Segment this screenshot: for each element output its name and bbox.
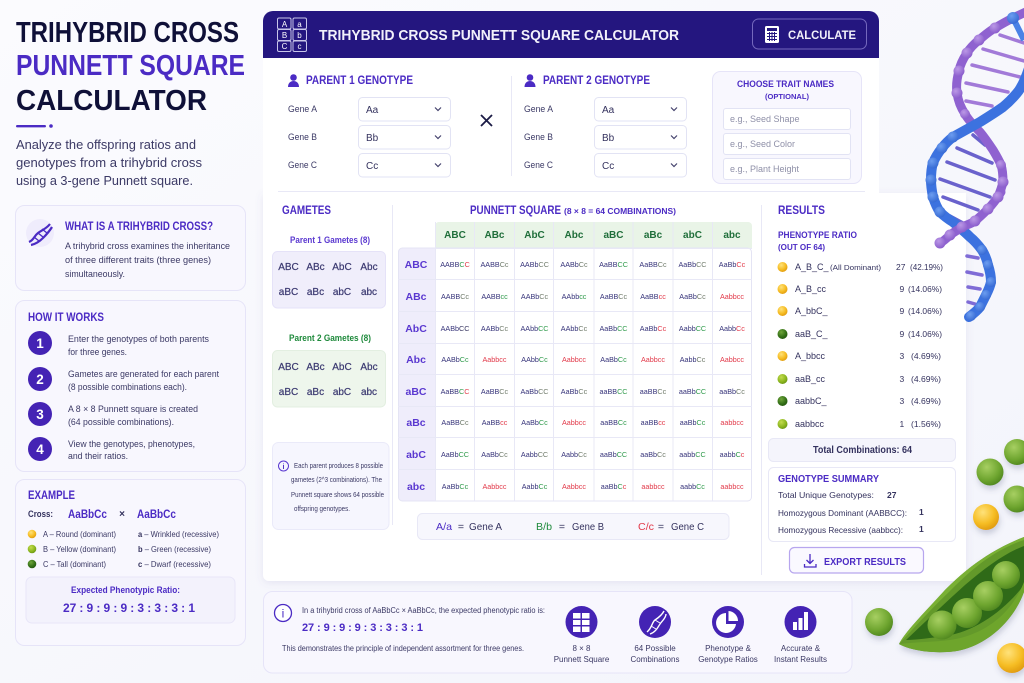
genotype summary: 27 — [887, 490, 897, 500]
info note: Punnett square shows 64 possible — [291, 490, 384, 499]
header bar — [263, 11, 879, 58]
trait names panel: e.g., Seed Shape — [730, 114, 800, 124]
title — [16, 17, 245, 117]
genotype cells: AABbCc — [560, 260, 588, 269]
feature: 64 combinations: Combinations — [631, 655, 679, 664]
heading: (8 × 8 = 64 COMBINATIONS) — [564, 207, 676, 216]
step 4 — [28, 437, 195, 461]
title underline accent — [16, 124, 53, 128]
genotype cells: AaBbCC — [679, 260, 706, 269]
total combinations: Total Combinations: 64 — [813, 445, 912, 456]
column headers: aBC — [603, 230, 624, 241]
genotype cells: AaBBCC — [441, 387, 469, 396]
parent 1 gametes: Abc — [360, 262, 378, 273]
genotype cells: AaBBcc — [640, 292, 666, 301]
row headers: abc — [407, 481, 425, 493]
parent 1 gametes: ABc — [306, 262, 325, 273]
row headers: ABc — [405, 291, 427, 303]
subtitle: using a 3-gene Punnett square. — [16, 173, 193, 188]
total combinations — [768, 438, 956, 462]
panel: bottom summary strip — [264, 592, 852, 673]
genotype cells: Aabbcc — [562, 482, 586, 491]
genotype cells: aaBBCc — [640, 387, 667, 396]
genotype cells: aaBbCc — [719, 387, 745, 396]
expected ratio box: Expected Phenotypic Ratio: — [71, 585, 180, 596]
genotype cells: AaBbCC — [441, 450, 469, 459]
heading: PUNNETT SQUARE — [470, 205, 561, 217]
genotype cells: AAbbcc — [562, 292, 587, 301]
parent 2 genotype: Gene A — [524, 104, 553, 114]
parent 1 genotype: Bb — [366, 133, 379, 144]
step 3: A 8 × 8 Punnett square is created — [68, 404, 198, 414]
phenotype rows: 3 — [900, 396, 904, 406]
phenotype rows: 1 — [900, 419, 904, 429]
genotype cells: AaBbCc — [640, 324, 667, 333]
phenotype rows: (1.56%) — [911, 419, 941, 429]
parent 2 gametes — [272, 333, 386, 407]
icon: info — [274, 604, 292, 622]
summary text: 27 : 9 : 9 : 9 : 3 : 3 : 3 : 1 — [302, 622, 423, 634]
row headers: aBC — [405, 386, 427, 398]
genotype cells: AaBBCc — [481, 387, 508, 396]
expected ratio box: 27 : 9 : 9 : 9 : 3 : 3 : 3 : 1 — [63, 601, 195, 615]
genotype cells: AabbCc — [719, 324, 745, 333]
parent 1 genotype: Aa — [366, 105, 379, 116]
parent 2 genotype: Gene B — [524, 132, 553, 142]
genotype cells: aaBbCc — [601, 482, 627, 491]
genotype cells: AaBbCC — [600, 324, 627, 333]
phenotype rows: 9 — [900, 284, 904, 294]
parent 1 gametes: AbC — [332, 262, 352, 273]
column headers: abC — [683, 230, 702, 241]
feature: accurate results: Instant Results — [774, 655, 827, 664]
peas in pod — [928, 561, 1020, 640]
feature: accurate results: Accurate & — [781, 644, 821, 653]
step 4: 4 — [36, 442, 44, 457]
step 2: (8 possible combinations each). — [68, 382, 187, 392]
genotype cells: Aabbcc — [641, 355, 665, 364]
genotype cells: AabbCc — [680, 355, 706, 364]
step 1: for three genes. — [68, 347, 127, 357]
genotype summary: Total Unique Genotypes: — [778, 490, 874, 500]
phenotype rows: aaB_C_ — [795, 329, 829, 339]
icon: abc grid: a — [297, 20, 302, 29]
icon: abc grid: B — [282, 31, 287, 40]
feature: accurate results — [774, 606, 827, 664]
genotype cells: aabbcc — [641, 482, 665, 491]
phenotype ratio heading: PHENOTYPE RATIO — [778, 230, 857, 241]
gene legend — [418, 514, 729, 540]
parent 2 gametes: Parent 2 Gametes (8) — [289, 333, 371, 343]
genotype summary: Homozygous Recessive (aabbcc): — [778, 525, 903, 535]
feature: 64 combinations: 64 Possible — [634, 644, 676, 653]
genotype cells: AABbCC — [441, 324, 469, 333]
summary text: This demonstrates the principle of independent assortment for three genes. — [282, 644, 524, 653]
cross — [28, 507, 176, 521]
genotype cells: AaBbCc — [521, 418, 548, 427]
row headers: abC — [406, 449, 426, 461]
export button — [790, 548, 924, 573]
genotype cells: AABbCc — [481, 324, 508, 333]
feature: 64 combinations — [631, 606, 679, 664]
heading: HOW IT WORKS — [28, 312, 104, 324]
row headers: Abc — [406, 354, 426, 366]
genotype cells: aaBBcc — [641, 418, 666, 427]
parent 1 gametes: aBc — [307, 287, 324, 298]
cross: AaBbCc — [137, 507, 176, 521]
body text: simultaneously. — [65, 269, 125, 279]
genotype cells: Aabbcc — [483, 482, 507, 491]
parent 1 genotype: PARENT 1 GENOTYPE — [306, 75, 413, 87]
parent 2 genotype: Bb — [602, 133, 615, 144]
panel: gametes — [272, 205, 389, 530]
genotype cells: AAbbCc — [521, 355, 548, 364]
column headers: abc — [723, 230, 741, 241]
genotype cells: aabbCC — [679, 450, 706, 459]
gene legend: Gene B — [572, 521, 604, 533]
feature: ratios: Phenotype & — [705, 644, 752, 653]
info note: gametes (2^3 combinations). The — [291, 475, 382, 484]
genotype cells: aaBbCc — [640, 450, 666, 459]
gene legend: A/a — [436, 521, 452, 533]
expected ratio box — [26, 577, 235, 623]
row headers — [405, 259, 428, 493]
body text: of three different traits (three genes) — [65, 255, 211, 265]
icon: info: i — [282, 606, 284, 620]
gene legend: = — [658, 521, 664, 533]
phenotype rows: 9 — [900, 306, 904, 316]
genotype cells: AabbCC — [679, 324, 706, 333]
row headers: AbC — [405, 323, 427, 335]
genotype cells: AAbbCC — [521, 324, 548, 333]
step 2 — [28, 367, 219, 392]
grid background — [398, 222, 752, 501]
gene legend: C/c — [638, 521, 654, 533]
genotype cells: AaBbCc — [561, 387, 588, 396]
genotype summary: GENOTYPE SUMMARY — [778, 473, 879, 485]
heading: WHAT IS A TRIHYBRID CROSS? — [65, 221, 213, 233]
genotype cells: aaBbCc — [680, 418, 706, 427]
allele legend — [28, 529, 219, 569]
genotype cells: AaBbCc — [679, 292, 706, 301]
title: PUNNETT SQUARE — [16, 50, 245, 82]
icon: abc grid: A — [282, 20, 288, 29]
parent 2 genotype: PARENT 2 GENOTYPE — [543, 75, 650, 87]
phenotype ratio heading — [778, 230, 857, 252]
genotype cells: AAbbCc — [561, 324, 588, 333]
allele legend: B – Yellow (dominant) — [43, 544, 116, 554]
genotype cells: AABBcc — [481, 292, 508, 301]
illustration: pea pod — [899, 537, 1024, 652]
phenotype rows — [778, 262, 943, 429]
icon: abc grid: c — [298, 42, 302, 51]
step 2: Gametes are generated for each parent — [68, 369, 219, 379]
step 1: Enter the genotypes of both parents — [68, 334, 209, 344]
parent 1 gametes: ABC — [278, 262, 299, 273]
header title: TRIHYBRID CROSS PUNNETT SQUARE CALCULATOR — [319, 28, 679, 44]
genotype cells: aabbcc — [720, 482, 744, 491]
parent 2 genotype: Cc — [602, 161, 614, 172]
genotype cells: Aabbcc — [720, 292, 744, 301]
feature: 8x8 punnett square — [554, 606, 610, 664]
parent 2 genotype: Gene C — [524, 160, 553, 170]
genotype cells: aaBbCC — [679, 387, 706, 396]
subtitle: genotypes from a trihybrid cross — [16, 155, 202, 170]
parent 1 gametes: abC — [333, 287, 351, 298]
genotype cells: AaBBCc — [639, 260, 667, 269]
allele legend: A – Round (dominant) — [43, 529, 116, 539]
body text: A trihybrid cross examines the inheritance — [65, 241, 230, 251]
icon: abc grid — [278, 18, 306, 52]
genotype cells: AaBbCC — [521, 387, 548, 396]
parent 1 genotype — [288, 74, 450, 177]
title: CALCULATOR — [16, 85, 207, 117]
parent 2 genotype — [524, 74, 686, 177]
panel: main calculator lower body — [263, 193, 966, 581]
genotype cells: AaBBcc — [482, 418, 508, 427]
genotype summary — [768, 468, 956, 542]
genotype cells: Aabbcc — [720, 355, 744, 364]
genotype summary: 1 — [919, 507, 924, 517]
subtitle — [16, 137, 202, 188]
genotype cells: aabbCc — [720, 450, 745, 459]
parent 1 gametes: aBC — [279, 287, 298, 298]
phenotype rows: aabbcc — [795, 419, 825, 429]
trait names panel: CHOOSE TRAIT NAMES — [737, 79, 834, 90]
phenotype rows: 27 — [896, 262, 906, 272]
genotype cells: Aabbcc — [562, 418, 586, 427]
column headers — [444, 230, 741, 241]
blue strand — [926, 12, 1024, 321]
parent 2 gametes: aBc — [307, 387, 324, 398]
gene legend: = — [458, 521, 464, 533]
phenotype rows: 3 — [900, 351, 904, 361]
subtitle: Analyze the offspring ratios and — [16, 137, 196, 152]
genotype cells: AabbCc — [522, 482, 548, 491]
phenotype rows: aaB_cc — [795, 374, 826, 384]
genotype cells: aaBBCc — [600, 418, 627, 427]
column headers: Abc — [565, 230, 584, 241]
phenotype rows: (14.06%) — [908, 284, 942, 294]
panel: example — [16, 480, 246, 646]
genotype cells: AaBbCc — [481, 450, 508, 459]
allele legend: a – Wrinkled (recessive) — [138, 529, 219, 539]
parent 1 genotype: Gene B — [288, 132, 317, 142]
column headers: aBc — [644, 230, 663, 241]
genotype cells: AABBCc — [481, 260, 509, 269]
genotype cells: AABBCc — [441, 292, 469, 301]
genotype cells: AaBBCc — [441, 418, 469, 427]
row headers: aBc — [406, 417, 426, 429]
phenotype rows: (14.06%) — [908, 329, 942, 339]
parent 1 genotype: Cc — [366, 161, 378, 172]
phenotype rows: (14.06%) — [908, 306, 942, 316]
allele legend: c – Dwarf (recessive) — [138, 559, 211, 569]
parent 2 gametes: ABC — [278, 362, 299, 373]
parent 2 gametes: Abc — [360, 362, 378, 373]
genotype cells: Aabbcc — [483, 355, 507, 364]
step 2: 2 — [36, 372, 44, 387]
cross: AaBbCc — [68, 507, 107, 521]
genotype cells: AABBCC — [440, 260, 470, 269]
cross: Cross: — [28, 509, 53, 520]
parent 1 gametes — [272, 235, 386, 308]
info note: Each parent produces 8 possible — [294, 461, 383, 470]
export button: EXPORT RESULTS — [824, 557, 906, 568]
genotype summary: 1 — [919, 524, 924, 534]
phenotype ratio heading: (OUT OF 64) — [778, 243, 825, 252]
column headers: ABc — [484, 230, 505, 241]
genotype cells: AabbCc — [561, 450, 587, 459]
illustration: dna helix — [926, 10, 1024, 321]
genotype cells: AABbCC — [520, 260, 549, 269]
parent 1 gametes: Parent 1 Gametes (8) — [290, 235, 370, 245]
phenotype rows: aabbC_ — [795, 396, 828, 406]
panel: what is a trihybrid cross — [16, 206, 246, 290]
genotype cells: AaBbCc — [442, 482, 469, 491]
step 3: 3 — [36, 407, 44, 422]
feature: ratios — [698, 606, 758, 664]
info note: offspring genotypes. — [294, 504, 350, 513]
step 4: View the genotypes, phenotypes, — [68, 439, 195, 449]
purple strand upper — [952, 10, 1024, 197]
panel: how it works — [16, 300, 246, 472]
parent 1 gametes: abc — [361, 287, 377, 298]
column headers: ABC — [444, 230, 466, 241]
genotype cells: AaBBCc — [600, 292, 627, 301]
column headers: AbC — [524, 230, 545, 241]
body text — [65, 241, 230, 279]
phenotype rows: (4.69%) — [911, 396, 941, 406]
parent 1 genotype: Gene A — [288, 104, 317, 114]
row headers: ABC — [405, 259, 428, 271]
summary text — [282, 606, 545, 653]
cross symbol — [481, 115, 492, 126]
summary text: In a trihybrid cross of AaBbCc × AaBbCc, the expected phenotypic ratio is: — [302, 606, 545, 615]
genotype cells: AABbCc — [521, 292, 548, 301]
heading: EXAMPLE — [28, 490, 75, 502]
allele legend: b – Green (recessive) — [138, 544, 211, 554]
heading: RESULTS — [778, 205, 825, 217]
genotype cells: aabbCc — [680, 482, 705, 491]
panel: results — [768, 205, 956, 573]
heading — [470, 205, 676, 217]
trait names panel: e.g., Seed Color — [730, 139, 795, 149]
genotype cells: aaBBCC — [600, 387, 627, 396]
genotype cells: AaBbCc — [600, 355, 627, 364]
panel: punnett square — [398, 205, 752, 540]
gene legend: Gene A — [469, 521, 502, 533]
parent 2 gametes: aBC — [279, 387, 298, 398]
cross: × — [119, 509, 125, 520]
gene legend: = — [559, 521, 565, 533]
step 4: and their ratios. — [68, 451, 128, 461]
phenotype rows: 9 — [900, 329, 904, 339]
parent 1 genotype: Gene C — [288, 160, 317, 170]
step 1 — [28, 331, 209, 357]
purple strand lower — [934, 192, 1004, 248]
genotype cells: aaBbCC — [600, 450, 627, 459]
phenotype rows: A_bbcc — [795, 351, 826, 361]
trait names panel: e.g., Plant Height — [730, 164, 800, 174]
phenotype rows: (All Dominant) — [830, 263, 882, 272]
panel: calculator top — [263, 11, 879, 195]
feature: 8x8 punnett square: Punnett Square — [554, 655, 610, 664]
step 3: (64 possible combinations). — [68, 417, 174, 427]
feature: 8x8 punnett square: 8 × 8 — [572, 644, 591, 653]
icon: abc grid: b — [297, 31, 302, 40]
calculate button: CALCULATE — [788, 28, 856, 42]
phenotype rows: (42.19%) — [910, 262, 943, 272]
illustration: loose peas — [865, 439, 1024, 673]
info note — [272, 442, 389, 530]
calculate button — [752, 19, 866, 49]
feature: ratios: Genotype Ratios — [698, 655, 758, 664]
gene legend: Gene C — [671, 521, 704, 533]
info note: i — [283, 464, 285, 471]
genotype cells: AaBBCC — [599, 260, 628, 269]
genotype cells: AaBbCc — [719, 260, 746, 269]
icon: abc grid: C — [282, 42, 288, 51]
allele legend: C – Tall (dominant) — [43, 559, 106, 569]
genotype cells: Aabbcc — [562, 355, 586, 364]
trait names panel — [712, 72, 862, 184]
genotype summary: Homozygous Dominant (AABBCC): — [778, 508, 907, 518]
genotype cells: aabbcc — [720, 418, 744, 427]
rungs — [940, 35, 1024, 304]
genotype cells — [440, 260, 746, 491]
parent 2 gametes: AbC — [332, 362, 352, 373]
parent 2 gametes: abc — [361, 387, 377, 398]
icon: dna — [26, 219, 54, 247]
phenotype rows: A_bbC_ — [795, 306, 829, 316]
step 1: 1 — [36, 336, 44, 351]
phenotype rows: (4.69%) — [911, 351, 941, 361]
genotype cells: AABbCc — [441, 355, 469, 364]
phenotype rows: (4.69%) — [911, 374, 941, 384]
title: TRIHYBRID CROSS — [16, 17, 239, 49]
parent 2 genotype: Aa — [602, 105, 615, 116]
phenotype rows: 3 — [900, 374, 904, 384]
genotype cells: AabbCC — [521, 450, 548, 459]
step 3 — [28, 402, 198, 427]
phenotype rows: A_B_C_ — [795, 262, 830, 272]
heading: GAMETES — [282, 205, 331, 217]
parent 2 gametes: ABc — [306, 362, 325, 373]
parent 2 gametes: abC — [333, 387, 351, 398]
trait names panel: (OPTIONAL) — [765, 92, 809, 101]
phenotype rows: A_B_cc — [795, 284, 827, 294]
gene legend: B/b — [536, 521, 552, 533]
